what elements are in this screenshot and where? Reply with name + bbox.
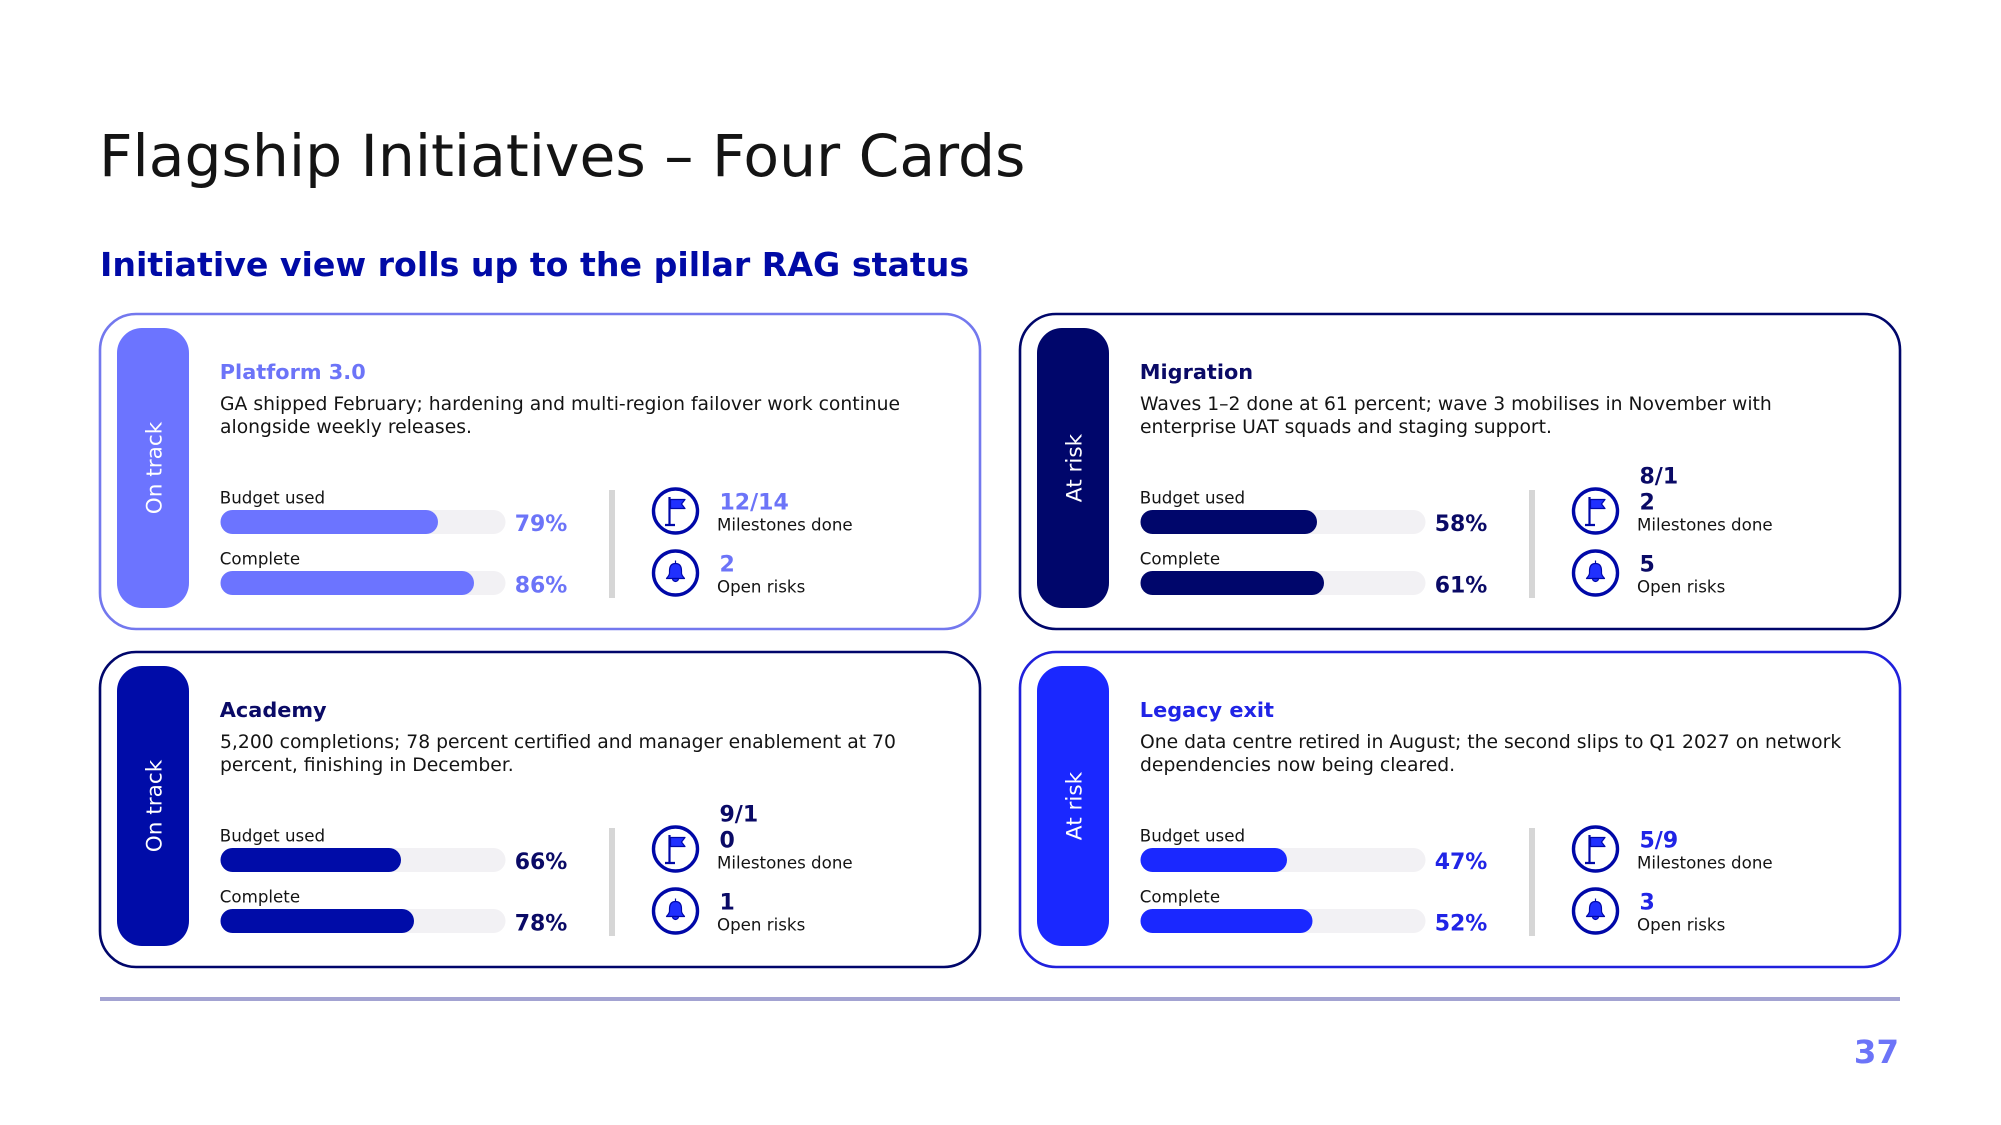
bar: complete: 52% xyxy=(1435,911,1487,936)
bar: complete: Complete xyxy=(220,550,300,569)
stat: milestones xyxy=(1637,828,1773,873)
card outline xyxy=(100,652,980,967)
bar: budget used xyxy=(1140,827,1487,875)
bar: budget used xyxy=(220,489,567,537)
stat: milestones xyxy=(717,802,853,873)
description: Waves 1–2 done at 61 percent; wave 3 mobilises in November with xyxy=(1140,394,1772,415)
stat: open risks: Open risks xyxy=(1637,578,1725,597)
stat: milestones xyxy=(1637,464,1773,535)
stat: open risks xyxy=(717,890,805,935)
status pill: At risk: At risk xyxy=(1062,433,1088,502)
bar: budget used: 66% xyxy=(515,850,567,875)
card outline xyxy=(1020,314,1900,629)
status pill: On track xyxy=(117,328,189,608)
bar: complete: Complete xyxy=(220,888,300,907)
bar: budget used: 47% xyxy=(1435,850,1487,875)
bar: budget used: Budget used xyxy=(220,827,325,846)
bar: complete xyxy=(1140,888,1487,936)
stat: open risks: Open risks xyxy=(1637,916,1725,935)
stat: milestones: 8/1 xyxy=(1640,464,1678,489)
stat: open risks: 3 xyxy=(1640,890,1655,915)
stat: milestones: Milestones done xyxy=(717,854,853,873)
bar: complete: Complete xyxy=(1140,888,1220,907)
stat: milestones: Milestones done xyxy=(1637,854,1773,873)
stat: milestones: Milestones done xyxy=(1637,516,1773,535)
bar: budget used: Budget used xyxy=(1140,827,1245,846)
status pill: On track: On track xyxy=(142,421,168,514)
bar: budget used: Budget used xyxy=(1140,489,1245,508)
stat: open risks: Open risks xyxy=(717,916,805,935)
card heading: Academy xyxy=(220,698,327,722)
status pill: On track: On track xyxy=(142,759,168,852)
page number: 37 xyxy=(1854,1033,1899,1071)
status pill: On track xyxy=(117,666,189,946)
icon: flag xyxy=(654,827,698,871)
icon: bell xyxy=(1574,889,1618,933)
stat: milestones: 2 xyxy=(1640,490,1655,515)
bar: complete xyxy=(220,888,567,936)
card heading: Migration xyxy=(1140,360,1253,384)
subtitle: Initiative view rolls up to the pillar RAG status xyxy=(100,245,969,284)
stat: open risks: Open risks xyxy=(717,578,805,597)
panel: Migration card xyxy=(1020,314,1900,629)
title: Flagship Initiatives – Four Cards xyxy=(99,122,1025,190)
icon: flag xyxy=(654,489,698,533)
bar: budget used: 79% xyxy=(515,512,567,537)
panel: Academy card xyxy=(100,652,980,967)
bar: complete: 86% xyxy=(515,573,567,598)
bar: complete: 61% xyxy=(1435,573,1487,598)
stat: open risks: 2 xyxy=(720,552,735,577)
bar: complete xyxy=(1140,550,1487,598)
stat: milestones: 12/14 xyxy=(720,490,789,515)
description: dependencies now being cleared. xyxy=(1140,755,1455,776)
stat: milestones: 5/9 xyxy=(1640,828,1678,853)
stat: open risks xyxy=(1637,890,1725,935)
stat: milestones xyxy=(717,490,853,535)
card heading: Legacy exit xyxy=(1140,698,1274,722)
stat: milestones: 0 xyxy=(720,828,735,853)
icon: bell xyxy=(654,889,698,933)
bar: budget used xyxy=(220,827,567,875)
stat: open risks xyxy=(1637,552,1725,597)
description: alongside weekly releases. xyxy=(220,417,472,438)
stat: open risks: 5 xyxy=(1640,552,1655,577)
icon: flag xyxy=(1574,489,1618,533)
bar: budget used: 58% xyxy=(1435,512,1487,537)
description: 5,200 completions; 78 percent certified and manager enablement at 70 xyxy=(220,732,896,753)
stat: milestones: Milestones done xyxy=(717,516,853,535)
bar: budget used xyxy=(1140,489,1487,537)
icon: bell xyxy=(654,551,698,595)
description: percent, finishing in December. xyxy=(220,755,514,776)
status pill: At risk xyxy=(1037,666,1109,946)
card outline xyxy=(100,314,980,629)
description: GA shipped February; hardening and multi-region failover work continue xyxy=(220,394,900,415)
bar: complete: Complete xyxy=(1140,550,1220,569)
icon: flag xyxy=(1574,827,1618,871)
status pill: At risk xyxy=(1037,328,1109,608)
description: enterprise UAT squads and staging support. xyxy=(1140,417,1552,438)
icon: bell xyxy=(1574,551,1618,595)
divider xyxy=(1529,490,1535,598)
bar: complete: 78% xyxy=(515,911,567,936)
panel: Platform 3.0 card xyxy=(100,314,980,629)
card outline xyxy=(1020,652,1900,967)
bar: complete xyxy=(220,550,567,598)
divider xyxy=(1529,828,1535,936)
bar: budget used: Budget used xyxy=(220,489,325,508)
divider xyxy=(609,828,615,936)
card heading: Platform 3.0 xyxy=(220,360,366,384)
description: One data centre retired in August; the second slips to Q1 2027 on network xyxy=(1140,732,1841,753)
panel: Legacy exit card xyxy=(1020,652,1900,967)
stat: open risks xyxy=(717,552,805,597)
status pill: At risk: At risk xyxy=(1062,771,1088,840)
stat: open risks: 1 xyxy=(720,890,735,915)
stat: milestones: 9/1 xyxy=(720,802,758,827)
divider xyxy=(609,490,615,598)
